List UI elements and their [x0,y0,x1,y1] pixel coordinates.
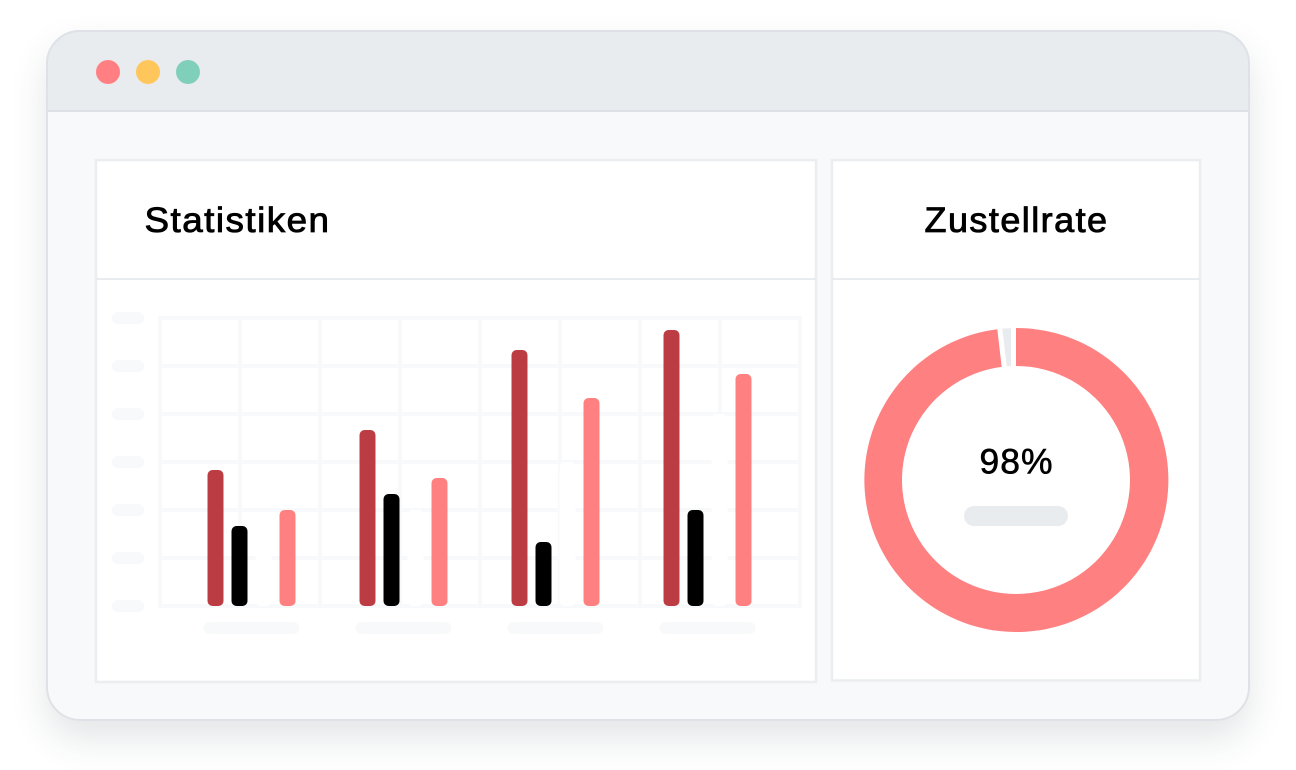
donut chart [864,328,1168,632]
heading: Statistiken: Statistiken [144,201,330,240]
bar group 2 [360,430,448,606]
bar group 3 [512,350,600,606]
x-axis label placeholders [204,622,756,634]
value: 98%: 98% [980,442,1054,482]
bar group 4 [664,330,752,606]
panel: statistics [96,160,816,682]
donut segment: delivered [864,328,1168,632]
chart grid [158,316,802,608]
donut segment: remainder [1002,328,1011,366]
window control buttons [96,60,200,84]
heading: Zustellrate: Zustellrate [924,201,1108,240]
y-axis label placeholders [112,312,144,612]
title bar [47,31,1249,111]
caption placeholder [964,506,1068,526]
bar group 1 [208,470,296,606]
panel: delivery rate [832,160,1200,680]
